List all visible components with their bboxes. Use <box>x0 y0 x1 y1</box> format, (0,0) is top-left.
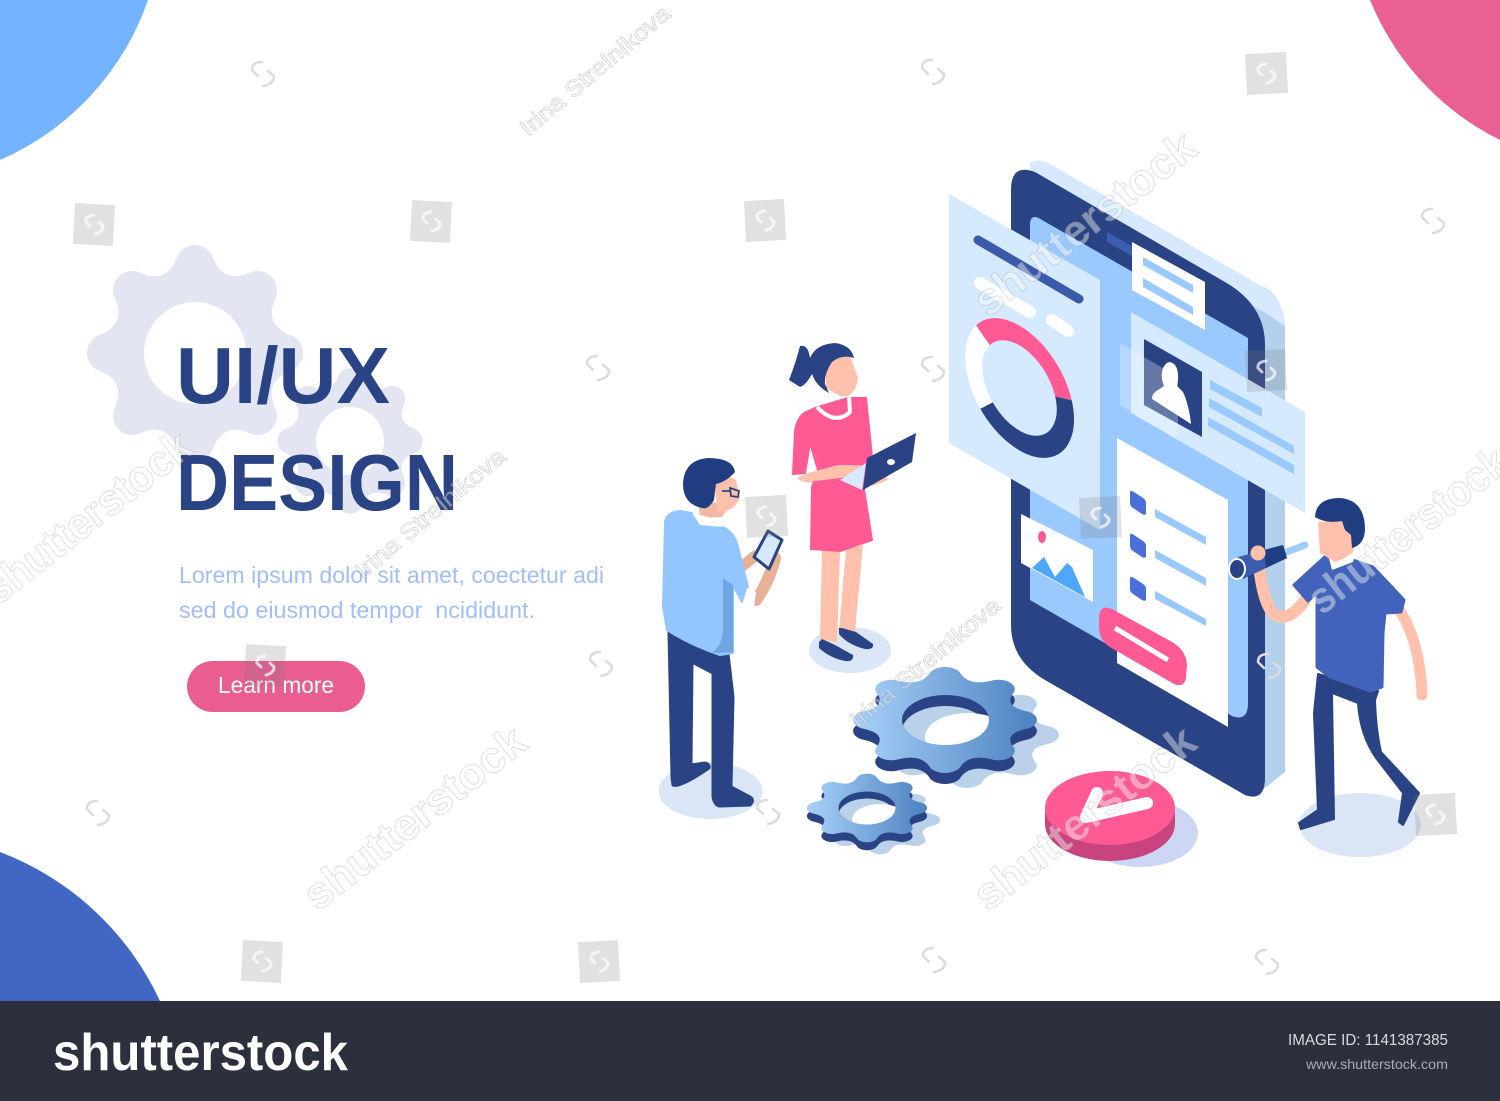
trousers <box>1299 674 1419 829</box>
gear: small <box>807 774 940 854</box>
footer bar <box>0 1001 1500 1101</box>
neck <box>698 500 730 518</box>
collar <box>817 396 850 418</box>
phone screen <box>1030 217 1248 717</box>
body text: Lorem ipsum dolor sit amet, coectetur adi <box>179 562 604 588</box>
watermark: stock agency marks: Irina Strelnikova <box>845 592 1005 733</box>
watermark: square mark glyphs <box>86 64 1444 971</box>
hair <box>1315 498 1365 548</box>
icon: background gears <box>87 245 423 514</box>
title <box>176 331 458 527</box>
watermark: stock agency marks: shutterstock <box>294 716 536 920</box>
person: woman with laptop <box>789 343 916 673</box>
donut chart <box>974 309 1065 467</box>
spyglass <box>1228 545 1305 580</box>
face <box>714 476 740 512</box>
right arm <box>1398 608 1422 695</box>
button: learn more <box>187 661 365 712</box>
trousers <box>669 632 752 806</box>
collar <box>692 513 723 527</box>
gear: large <box>853 667 1059 788</box>
face <box>1318 520 1358 562</box>
footer logo: shutterstock <box>53 1024 348 1082</box>
legs <box>820 550 840 642</box>
far arm <box>740 556 755 568</box>
left arm <box>1258 555 1305 617</box>
watermark: stock agency marks: shutterstock <box>964 122 1206 326</box>
phone side <box>1240 287 1285 788</box>
watermark: stock agency marks: Irina Strelnikova <box>350 443 510 584</box>
image card <box>1021 514 1093 602</box>
top card <box>1132 242 1205 330</box>
shirt <box>1294 554 1404 691</box>
profile panel <box>1120 312 1305 513</box>
shoes <box>819 639 853 661</box>
footer image id: IMAGE ID: 1141387385 <box>1288 1032 1448 1049</box>
shirt <box>663 511 748 655</box>
pink button on phone <box>1099 608 1187 685</box>
title: UI/UX <box>176 331 390 420</box>
small pill on phone <box>1107 232 1132 256</box>
glasses <box>722 488 739 497</box>
person: man with phone <box>658 458 782 819</box>
collar <box>1328 555 1355 570</box>
title: DESIGN <box>176 438 458 527</box>
phone body <box>1011 170 1265 797</box>
corner circle: top left <box>0 0 148 160</box>
hair <box>683 458 735 508</box>
corner circle: top right <box>1370 0 1500 140</box>
corner circle: bottom left <box>0 852 160 1001</box>
button: learn more: Learn more <box>218 672 334 698</box>
face <box>826 355 858 396</box>
watermark: square marks <box>73 52 1457 983</box>
cuff <box>742 588 756 607</box>
chart panel <box>949 194 1100 530</box>
icon: check badge <box>1045 771 1198 867</box>
arm <box>797 465 862 482</box>
phone top rim <box>1030 160 1285 326</box>
phone <box>754 531 782 569</box>
person: man with spyglass <box>1228 498 1422 857</box>
laptop <box>840 463 866 490</box>
watermark: stock agency marks: Irina Strelnikova <box>515 0 675 141</box>
phone <box>949 160 1305 797</box>
hair <box>789 343 854 393</box>
body text: sed do eiusmod tempor ncididunt. <box>179 597 535 623</box>
footer url: www.shutterstock.com <box>1305 1056 1448 1072</box>
body text <box>179 562 604 623</box>
watermark: stock agency marks: shutterstock <box>964 716 1206 920</box>
list card <box>1117 438 1228 727</box>
dress <box>793 398 872 551</box>
forearm <box>756 558 775 600</box>
watermark: small marks <box>87 60 1444 974</box>
